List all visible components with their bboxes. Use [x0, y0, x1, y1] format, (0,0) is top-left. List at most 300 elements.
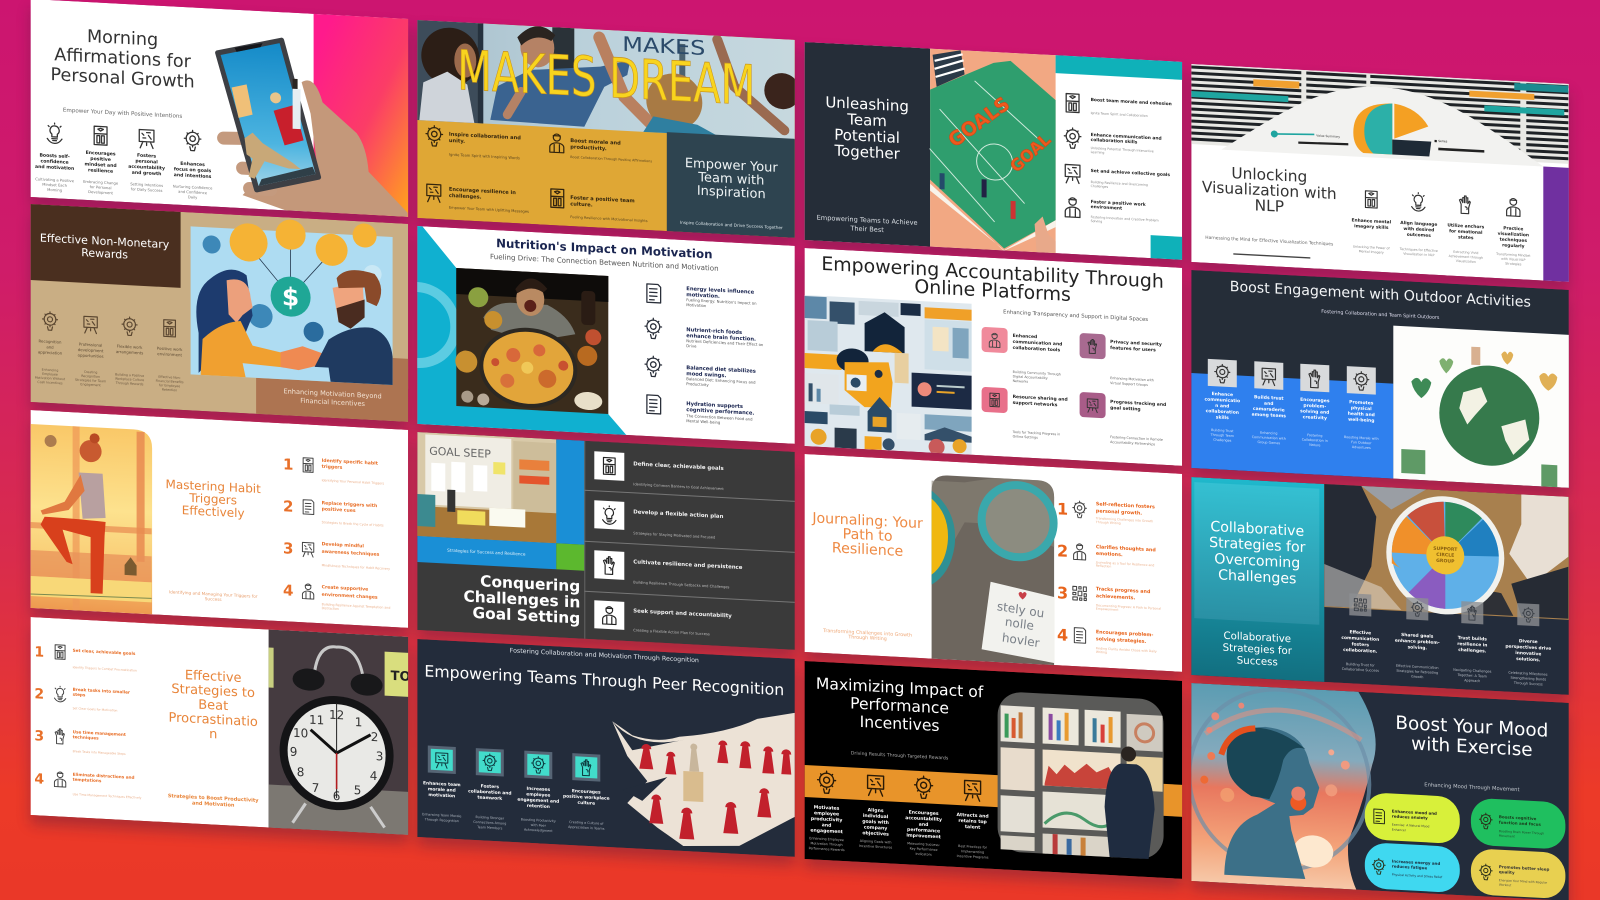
heading: Empower Your [685, 156, 778, 176]
point 3: Set and achieve collective goals [1091, 168, 1170, 178]
note 2: Nutrient Deficiencies and Their Effect on [686, 338, 764, 347]
point 3: problem- [1303, 403, 1326, 410]
note 3: Approach [1464, 678, 1480, 683]
step 3: Tracks progress and [1096, 586, 1151, 595]
title: Strategies to [171, 682, 255, 701]
point 3: improvement [906, 833, 942, 840]
icon: chart board [965, 780, 981, 801]
point 2: collaboration and [468, 788, 511, 797]
row 2: Develop a flexible action plan [633, 509, 724, 520]
step 2: Replace triggers with [322, 500, 377, 509]
note 2: Building Stronger [475, 815, 505, 821]
point 3: Encourages [1300, 397, 1330, 404]
point 1: unity. [449, 138, 465, 145]
note 4: Accountability Partnerships [1110, 440, 1155, 446]
title: Beat [198, 698, 228, 714]
note 4: Mental Well-being [686, 418, 721, 425]
step 2: 2 [34, 686, 44, 703]
point 2: features for users [1110, 345, 1156, 353]
point 2: mindset and [84, 161, 117, 169]
panel: Habit Triggers slide [31, 410, 408, 628]
note 4: Strategies [1505, 261, 1522, 266]
row 4: Creating a Flexible Action Plan for Success [633, 628, 710, 636]
pill 2: function and focus [1499, 820, 1541, 827]
note 4: Fun Outdoor [1351, 440, 1372, 445]
point 4: techniques [1500, 237, 1527, 244]
pill 1 [1365, 792, 1460, 844]
point 3: Fosters [137, 153, 156, 160]
panel: Accountability slide [805, 248, 1182, 468]
image: alarm clock: 4 [370, 769, 377, 783]
title: Team [846, 110, 887, 130]
image: goals field: GOALS [944, 93, 1014, 152]
point 2: Fosters [481, 783, 499, 790]
step 4: temptations [73, 777, 102, 783]
note 1: Mental Imagery [1359, 249, 1384, 255]
pill 1: Enhances mood and [1392, 809, 1437, 816]
note 2: Enhancing Motivation with [1110, 376, 1154, 382]
point 2: individual [863, 813, 889, 820]
point 1: Enhance [1212, 391, 1233, 398]
step 2: positive cues [322, 506, 356, 514]
step 2 [1057, 541, 1156, 571]
point 4: cognitive performance. [686, 407, 754, 417]
note 2: Communication with [1252, 435, 1286, 441]
note 4: and Confidence [178, 190, 208, 195]
image: green globe [1393, 326, 1569, 488]
row 4 [594, 600, 732, 638]
note 3: Challenges [1091, 184, 1109, 189]
note 4: Adventures [1352, 445, 1371, 450]
step 2: Break tasks into smaller [73, 687, 131, 695]
icon tile 4 [572, 753, 600, 782]
point 4: goal setting [1110, 405, 1141, 413]
panel: Nutrition slide [379, 224, 795, 444]
point 2: Nutrient-rich foods [686, 327, 742, 336]
icon: hand [1459, 196, 1470, 214]
note 1: Networks [1013, 379, 1028, 384]
pill 1: Exercise: A Natural Mood [1392, 823, 1430, 829]
note 4: Fostering Innovation and Creative Problem [1091, 215, 1159, 223]
step 1 [34, 644, 137, 673]
step 3: Break Tasks into Manageable Steps [73, 749, 126, 756]
panel: Peer Recognition slide [417, 639, 795, 857]
icon tile 3 [524, 751, 552, 779]
note 3: Indicators [915, 852, 932, 857]
panel: Collaborative Strategies slide [1191, 477, 1569, 695]
point 2: Professional [79, 342, 102, 348]
note 1: Fueling Energy: Nutrition's Impact on [686, 297, 757, 306]
point 3: retention [527, 803, 550, 810]
point 1: Enhance mental [1351, 217, 1392, 226]
subtitle: Their Best [849, 224, 884, 234]
note 4: Financial Benefits [156, 379, 184, 384]
point 2: collaboration skills [1091, 137, 1138, 145]
step 4: 4 [34, 771, 44, 788]
point 1: collaboration tools [1013, 345, 1060, 353]
icon: phone document [647, 284, 661, 303]
point 1: Effective [1350, 629, 1371, 636]
icon tile 4 [1347, 366, 1376, 395]
icon: person [550, 134, 564, 153]
image: support circle group: CIRCLE [1436, 552, 1454, 559]
point 2: Encourages [86, 150, 116, 157]
point 4: well-being [1348, 417, 1374, 424]
subtitle: Through Writing [847, 634, 887, 642]
icon tile 2 [1254, 361, 1283, 390]
panel: Boost Your Mood slide [1189, 683, 1569, 900]
title: Effectively [182, 503, 245, 520]
image: goal board desk [417, 432, 556, 543]
point 2: development [78, 347, 104, 353]
image: alarm clock: 6 [333, 789, 340, 803]
step 3: Develop mindful [322, 541, 364, 550]
image: handshake illustration [191, 214, 393, 385]
point 4: innovative [1515, 650, 1541, 657]
point 3: solving and [1300, 408, 1329, 416]
point 2: solving. [1408, 644, 1427, 651]
icon tile 4 [1517, 603, 1539, 626]
panel: Outdoor Activities slide [1191, 270, 1569, 488]
subtitle: Identifying and Managing Your Triggers for [169, 589, 258, 599]
point 4: talent [965, 824, 981, 831]
image: data visual with pie [1191, 64, 1569, 168]
point 3: engagement and [517, 797, 559, 805]
point 1: productivity [811, 816, 842, 824]
point 1: communication and [1013, 339, 1062, 348]
note 1: Through Team [1210, 433, 1234, 438]
title: n [209, 727, 217, 742]
subtitle: Fostering Collaboration and Motivation Through Recognition [510, 647, 699, 664]
title: Empowering Accountability Through [821, 253, 1164, 293]
image: digital collage [805, 295, 972, 457]
point 2: resilience [88, 167, 113, 175]
note 4: Incentive Programs [957, 854, 989, 860]
image: note and glass on table: hovler [1001, 630, 1040, 650]
note 3: Collaboration in [1302, 438, 1328, 443]
title: Performance [850, 694, 949, 718]
note 3: with Peer [531, 823, 547, 828]
note 2: Techniques for Effective [1399, 247, 1438, 253]
icon: board [94, 126, 107, 145]
note 4: Retention [162, 387, 177, 392]
note 1: Employee [42, 372, 58, 377]
title: Affirmations for [54, 45, 192, 72]
image: goals field [930, 49, 1056, 253]
icon: person [1507, 198, 1520, 216]
point 1: Inspire collaboration and [449, 132, 521, 141]
note 2: Growth [1411, 675, 1423, 679]
title: Strategies for [1209, 535, 1306, 556]
note 4: Implementing [961, 849, 984, 854]
point 1: and [822, 822, 831, 829]
point 3: arrangements [116, 349, 143, 355]
panel: Performance Incentives slide [805, 661, 1183, 879]
note 3: Setting Intentions [130, 182, 163, 188]
title: with Exercise [1411, 734, 1533, 761]
note 4: The Connection Between Food and [685, 413, 753, 422]
point 3: Increases [526, 786, 551, 793]
icon: chart [551, 189, 564, 208]
point 3: and [919, 822, 928, 828]
panel: Journaling slide [805, 454, 1182, 672]
note 2: Drive [686, 343, 697, 349]
point 3: Resource sharing and [1013, 394, 1068, 403]
step 1: personal growth. [1096, 508, 1142, 517]
point 1: Energy levels influence [686, 286, 755, 296]
image: note and glass on table [932, 475, 1055, 665]
title: Conquering [480, 572, 580, 596]
point 2: company [864, 826, 887, 832]
step 3: techniques [73, 734, 99, 741]
note 1: Challenges [1213, 438, 1232, 443]
point 4: culture [578, 800, 595, 807]
icon card 3 [982, 387, 1008, 413]
pill 2: Movement [1499, 834, 1516, 839]
image: head in a glowing bubble [1189, 683, 1376, 891]
point 1: communicatio [1205, 396, 1240, 404]
step 4: Finding Clarity Amidst Chaos with Daily [1096, 646, 1157, 653]
step 3: Empowerment [1096, 607, 1119, 612]
image: data visual with pie: ■ Series [1434, 139, 1448, 143]
caption: Enhancing Motivation Beyond [283, 387, 382, 400]
icon card 1 [982, 327, 1008, 353]
image: alarm clock: 11 [309, 713, 324, 727]
point 3: for emotional [1449, 228, 1483, 236]
point 1: Enhanced [1013, 333, 1037, 340]
note 1: Motivation Through [811, 841, 843, 847]
pill 3: Increases energy and [1392, 859, 1440, 866]
note 2: for Personal [90, 185, 112, 190]
panel: Morning Affirmations slide [31, 0, 409, 217]
point 4: visualization [1498, 231, 1529, 238]
point 3: support networks [1013, 400, 1058, 408]
subtitle: Empower Your Day with Positive Intentions [63, 108, 182, 120]
pill 3: reduces fatigue [1392, 864, 1427, 870]
title: Boost Your Mood [1395, 713, 1548, 742]
point 4: Progress tracking and [1110, 399, 1166, 408]
point 4: regularly [1502, 242, 1525, 250]
pill 4: Promotes better sleep [1499, 864, 1549, 872]
point 3: Encourage resilience in [449, 187, 516, 196]
note 3: Achievement through [1449, 254, 1483, 260]
title: Effective [185, 668, 242, 686]
note 2: Visualization in NLP [1403, 252, 1434, 257]
step 2: Clarifies thoughts and [1096, 544, 1156, 553]
panel: inspire box [667, 132, 795, 238]
image: woman in yoga pose [31, 424, 152, 614]
point 1: fosters [1352, 641, 1369, 648]
step 1: 1 [34, 644, 44, 661]
note 2: Group Games [1257, 440, 1280, 445]
note 4: Through Success [1513, 681, 1543, 686]
note 4: Fostering Connection in Remote [1110, 435, 1163, 442]
point 4: Diverse [1519, 638, 1538, 645]
note 2: Enhancing [1260, 431, 1277, 436]
subtitle: Enhancing Transparency and Support in Digital Spaces [1003, 309, 1148, 323]
point 4: Foster a positive team [570, 195, 635, 204]
step 4: Writing [1096, 650, 1107, 654]
panel: Makes Dream slide [417, 20, 800, 238]
step 4 [283, 581, 390, 614]
subtitle: Success [1237, 655, 1278, 669]
step 4: Eliminate distractions and [73, 772, 135, 780]
point 4: Practice [1503, 225, 1523, 232]
note 1: Building Trust for [1346, 662, 1375, 668]
title: NLP [1255, 196, 1284, 216]
step 3 [283, 539, 390, 571]
caption: Inspire Collaboration and Drive Success Together [680, 220, 783, 230]
heading: Inspiration [697, 184, 766, 202]
point 1: and [46, 344, 54, 350]
image: celebrating team: MAKES [622, 32, 705, 60]
note 2: Embracing Change [83, 180, 119, 186]
point 3: resilience in [1457, 641, 1487, 649]
icon tile 1 [1208, 359, 1237, 387]
note 3: Navigating Challenges [1453, 668, 1492, 674]
note 3: Fostering [1307, 433, 1322, 438]
pill 1: Enhancer [1392, 828, 1407, 832]
note 3: Building Resilience and Overcoming [1091, 180, 1148, 187]
step 2: emotions. [1096, 551, 1123, 558]
point 2: camaraderie [1253, 406, 1285, 414]
row 3 [594, 550, 743, 590]
point 3: Trust builds [1458, 635, 1487, 643]
note 3: Measuring Success: [907, 841, 940, 847]
point 4: Enhances [180, 161, 205, 168]
note 3: for Daily Success [131, 187, 162, 193]
point 4: environment [1091, 204, 1122, 212]
subtitle: Strategies for [1223, 643, 1293, 657]
point 2: opportunities [78, 352, 104, 359]
point 4: culture. [570, 201, 593, 209]
point 1: Recognition [39, 338, 62, 345]
image: alarm clock: 7 [312, 781, 319, 795]
note 1: Enhancing Employee [809, 836, 844, 842]
icon tile 1 [1349, 593, 1371, 616]
icon: gear [184, 130, 201, 151]
subtitle: and Motivation [192, 800, 235, 809]
step 2: 2 [283, 497, 293, 516]
pill 4: Workout [1499, 883, 1512, 887]
title: Personal Growth [51, 65, 195, 93]
point 2: with desired [1403, 226, 1434, 233]
step 2: 2 [1057, 541, 1068, 561]
image: handshake illustration: $ [282, 282, 299, 312]
point 3: accountability [128, 164, 165, 172]
point 1: morale and [428, 786, 456, 794]
subtitle: Collaborative [1224, 631, 1291, 645]
note 3: Workplace Culture [115, 377, 144, 382]
note 2: Boost Collaboration Through Positive Affirmations [570, 155, 652, 163]
title: Resilience [832, 540, 903, 560]
note 1: Mindset Each [42, 183, 68, 188]
title: Boost Engagement with Outdoor Activities [1230, 279, 1531, 311]
point 4: positive workplace [563, 793, 610, 802]
image: alarm clock: 9 [290, 745, 297, 759]
icon: board [84, 316, 97, 334]
step 1 [1057, 499, 1155, 527]
headline text in image: MAKES DREAM [457, 38, 755, 118]
subtitle: Strategies to Boost Productivity [168, 793, 259, 804]
point 2: enhance problem- [1395, 638, 1440, 646]
point 4: physical [1351, 405, 1372, 412]
subtitle: Empowering Teams to Achieve [817, 214, 918, 227]
image: alarm clock: 12 [329, 708, 344, 722]
step 4: 4 [1057, 625, 1068, 645]
icon: gear [1064, 128, 1081, 149]
icon: chart board [1065, 164, 1080, 184]
point 3: Utilize anchors [1447, 222, 1485, 230]
title: Collaborative [1210, 519, 1304, 540]
note 1: Motivation Without [35, 376, 66, 381]
image: alarm clock: TOI [391, 669, 415, 685]
step 4: Create supportive [322, 584, 368, 593]
pill 3 [1365, 842, 1460, 893]
icon: badge [915, 776, 933, 799]
note 1: Enhancing Team Morale [422, 812, 461, 818]
step 2: Strategies to Break the Cycle of Habits [322, 520, 384, 528]
point 3: Encourages [909, 809, 939, 817]
point 2: Builds trust [1254, 394, 1284, 402]
icon: brain [645, 356, 662, 377]
image: excited man with paella [455, 268, 608, 414]
step 3 [1057, 583, 1161, 614]
note 3: Tools for Tracking Progress in [1012, 430, 1060, 436]
point 4: Hydration supports [686, 401, 743, 410]
note 2: Strategies for Retreating [1396, 669, 1438, 675]
title: Rewards [81, 246, 128, 262]
panel: Unleashing Team Potential slide [805, 42, 1183, 260]
image: support circle group: GROUP [1436, 558, 1455, 565]
step 3: Use time management [73, 729, 126, 737]
note 1: Through Recognition [424, 817, 459, 823]
point 3: mood swings. [686, 371, 726, 379]
row 3: Building Resilience Through Setbacks and Challenges [633, 580, 730, 589]
title: Overcoming [1214, 551, 1300, 572]
row 3: Cultivate resilience and persistence [633, 559, 743, 571]
caption: Financial Incentives [300, 397, 366, 408]
caption: Strategies for Success and Resilience [447, 548, 526, 557]
icon tile 2 [476, 748, 504, 777]
point 4: and intentions [174, 172, 212, 180]
point 3: personal [135, 158, 158, 166]
point 3: creativity [1303, 414, 1327, 422]
point 4: perspectives drive [1505, 643, 1551, 652]
step 1: Identifying Your Personal Habit Triggers [322, 478, 384, 486]
note 3: Extracting Vivid [1453, 250, 1478, 255]
title: Nutrition's Impact on Motivation [496, 236, 712, 261]
point 3: challenges. [1458, 647, 1487, 655]
step 4: Use Time Management Techniques Effectively [73, 792, 142, 800]
image: goal board desk: GOAL SEEP [429, 445, 491, 461]
point 1: engagement [810, 828, 844, 835]
pill 3: Physical Activity and Stress Relief [1392, 873, 1443, 879]
step 1 [283, 455, 384, 486]
step 1: Through Writing [1095, 520, 1121, 525]
note 1: Cultivating a Positive [35, 177, 75, 183]
step 3: Mindfulness Techniques for Habit Recovery [322, 563, 390, 571]
step 1: Self-reflection fosters [1096, 501, 1155, 510]
note 2: Virtual Support Groups [1110, 381, 1148, 387]
pill 1: reduces anxiety [1392, 814, 1428, 820]
image: red pawns and leader [612, 703, 795, 852]
point 3: Balanced diet stabilizes [686, 365, 756, 375]
row 1: Identifying Common Barriers to Goal Achievement [633, 482, 724, 491]
point 4: solutions. [1516, 656, 1541, 663]
point 2: and [1264, 401, 1274, 407]
image: note and glass on table: nolle [1004, 615, 1035, 633]
